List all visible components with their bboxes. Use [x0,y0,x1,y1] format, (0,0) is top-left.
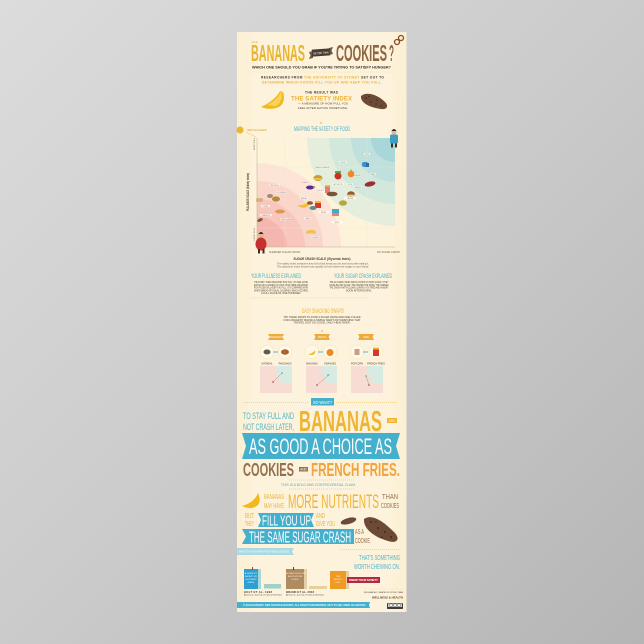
panel: your fullness explained: YOUR FULLNESS EXPLAINED [251,274,301,280]
swap 1: PANCAKES [279,362,292,366]
ribbon: as good a choice as [242,433,400,459]
heading: mapping the satiety of food [294,122,350,133]
y axis label: FULLNESS SCALE (Satiety Index) [246,173,250,211]
icon: satiety index burst: SEE THE LEGEND [247,128,267,132]
book: orange: SATIETY [334,578,343,581]
book captions [244,590,324,596]
food: rice plate [326,192,338,196]
food: pretzel [267,194,273,198]
food labels: BEEF [371,174,376,176]
icon: large cookie [364,517,398,542]
food labels: YOGURT [316,190,325,192]
icon: banana small [242,493,260,508]
panel: your sugar crash explained: THE CRASH THAT FOLLOWS, LEAVING YOU TIRED AND HUNGRY [330,286,389,290]
axis end labels: SLEEPIER SUGAR CRASH [269,251,300,254]
food labels: CORN FLAKES [280,218,293,221]
small label: and [299,467,308,472]
icon: small cookie [340,516,357,526]
conclusion headline: NOT CRASH LATER, [243,422,294,432]
ribbon: as good a choice as: AS GOOD A CHOICE AS [249,434,392,459]
icon: crashed person [256,232,266,254]
axis end labels: NO SUGAR CRASH [377,251,400,254]
fill you up line [245,512,335,530]
sugar crash line: COOKIE. [355,538,371,545]
panel: easy snacking swaps: TRY THESE SWAPS TO AVOID A SUGAR CRASH AND FEEL FULLER [284,315,361,319]
food labels: PRETZELS [270,185,280,187]
food labels: ORANGE [353,174,362,177]
panel: easy snacking swaps: TASTES JUST AS GOOD, ONLY HEALTHIER. [294,321,351,325]
book: tan [284,567,307,589]
food: pie 2 [272,196,280,202]
satiety index block: FEEL AFTER EATING SOMETHING. [298,106,348,110]
book: blue: A GUIDE TO [245,572,258,575]
panel: easy snacking swaps: EASY SNACKING SWAPS! [302,308,344,315]
small label: are: ARE [389,419,396,423]
so what badge: SO WHAT? [313,400,332,405]
panel: your fullness explained: EATING 240 CALORIES OF FOOD. HIGH FIBRE AND WATER [254,284,308,287]
panel: your sugar crash explained [330,274,392,292]
intro text [261,76,384,84]
satiety index block [291,90,352,110]
fill you up line: GIVE YOU [316,521,335,528]
food labels: CAKE [305,217,311,220]
closing line: THAT'S SOMETHING [359,553,400,562]
swap 1: OATMEAL [261,362,273,366]
so what badge [243,398,397,406]
panel: your sugar crash explained: YOUR SUGAR CRASH EXPLAINED [334,274,392,280]
small label: and: AND [300,468,308,472]
food labels: DOUGHNUT [309,237,321,239]
fill you up line: BUT [245,513,254,520]
bold claim note: THIS IS A BOLD AND CONTROVERSIAL CLAIM. [281,483,356,487]
swap 3: POPCORN [351,362,363,366]
title: COOKIES [336,40,387,66]
food labels: CROISSANT [276,191,288,194]
red ribbon [347,577,380,583]
small teal bookmark [264,584,281,588]
book: orange: THE [336,576,341,578]
red ribbon: KNOW YOUR SATIETY [349,578,378,582]
book: blue: SATIETY BY [245,575,258,578]
intro text: DETERMINE WHICH FOODS FILL YOU UP AND KEEP YOU FULL. [262,80,382,84]
panel: your fullness explained: THE SATIETY INDEX MEASURES HOW FULL YOU FEEL AFTER [254,281,308,284]
food labels: BAKED BEANS [316,166,330,169]
food: grapes [306,186,315,190]
satiety index block: — A MEASURE OF HOW FULL YOU [298,102,348,106]
swap 2: ORANGES [324,362,336,366]
swap 2: SNACK [318,336,327,339]
food labels [260,153,376,239]
conclusion headline [242,406,400,480]
panel: your fullness explained: WHITE BREAD OF EQUAL CALORIES, WHICH SCORES [254,289,308,292]
axes [257,138,395,247]
conclusion headline: TO STAY FULL AND [243,411,294,421]
book: blue: INDEX [248,582,255,584]
swap 2 [305,330,337,393]
intro text: RESEARCHERS FROM THE UNIVERSITY OF SYDNEY SET OUT TO [261,76,384,80]
food: pie [314,175,322,181]
heading: mapping the satiety of food: MAPPING THE SATIETY OF FOOD [294,127,350,133]
food: bread [275,210,285,214]
chart: satiety map: LEAST FULL [253,227,256,240]
book: tan: GUIDE [292,579,299,581]
food labels: CHEESE [354,187,362,189]
icon: cookie [361,94,387,109]
food: banana [297,202,309,208]
subtitle: WHICH ONE SHOULD YOU GRAB IF YOU'RE TRYING TO SATISFY HUNGER? [252,64,392,70]
title: ARE [251,40,258,44]
book: orange: DIET [336,582,341,584]
fill you up line: FILL YOU UP [262,512,311,530]
axis end labels [269,251,400,254]
panel: your sugar crash explained: SOON AFTER EATING. [346,289,372,292]
sugar crash line: THE SAME SUGAR CRASH [249,530,351,546]
chart: satiety map: MOST FULL [254,137,256,150]
icon: satiety index burst [236,126,267,137]
small tan bookmark [309,586,327,589]
footer bar: © 2013 HUNGRY. SEE SOURCE BOOKS. ALL RIGHTS RESERVED. NOT TO BE USED AS ADVICE. [243,603,366,607]
credits: WELLNESS & HEALTH [372,596,403,600]
sources ribbon: WANT TO KNOW MORE? READ THESE SOURCES [239,550,289,554]
food: blueberries [362,162,369,167]
nutrients line: BANANAS [264,494,284,501]
icon: banana [261,91,284,109]
x axis title and note [277,257,369,268]
sources ribbon [237,548,294,555]
swap 1: BREAKFAST [269,336,284,339]
panel: your fullness explained [251,274,308,295]
food: steak [364,181,376,187]
credits: INFOGRAPHIC CREATED BY STUDIO TEAM [364,591,403,594]
food: burger [307,201,313,205]
panel: easy snacking swaps: FOR LONGER BY MAKING A SIMPLE SWAP FOR SOMETHING THAT [284,318,361,322]
panel: easy snacking swaps [260,308,385,393]
food labels: APPLE PIE [333,183,343,186]
footer bar [237,602,370,608]
food labels: FRIES [321,212,327,214]
book: orange [330,571,349,589]
panel: your sugar crash explained: THE GLYCEMIC INDEX RANKS FOODS ON HOW QUICKLY THEY [330,281,389,284]
book captions: American Journal of Clinical Nutrition [286,594,324,596]
swap 3: FRENCH FRIES [367,362,385,366]
food: salad dish [310,206,316,210]
chart: satiety map [246,138,395,248]
text: ? [389,40,394,66]
fill you up line: AND [316,513,325,520]
poster sheet [237,32,406,612]
credits [364,591,403,600]
fill you up line: THEY [245,521,254,528]
small label: are [387,418,397,423]
ribbon: or are they [309,47,333,59]
book: tan: THE NEW GLUCOSE [284,573,306,575]
nutrients line: THAN [382,494,398,501]
nutrients line: MORE NUTRIENTS [288,492,379,513]
conclusion headline: BANANAS [299,406,382,438]
food labels: GRAPES [301,181,310,184]
icon: thin full person [390,129,398,148]
closing line [354,553,400,571]
book: blue: GLYCEMIC [245,579,257,581]
x axis title and note: The satiety index measures how full a food keeps you for two hours after eating it. [277,262,369,266]
ribbon: or are they: BETTER THAN [313,50,329,56]
food: peanuts [256,198,263,202]
food labels: BREAD [301,197,308,200]
book: tan: REVOLUTION [288,576,303,578]
swap 3 [350,334,385,393]
food labels: PASTA [347,197,354,200]
conclusion headline: COOKIES [243,460,294,480]
food labels: FISH [365,154,370,156]
food: milk carton [332,209,339,216]
title: BANANAS [251,40,305,66]
nutrients line: MAY HAVE [264,503,284,510]
bold claim note [281,480,356,489]
book captions: American Journal of Clinical Nutrition [244,594,282,596]
icon: creative commons badge [387,603,403,609]
sugar crash line [242,529,371,546]
book: blue [244,567,261,589]
satiety index block: THE RESULT WAS [305,90,339,94]
nutrients line: COOKIES [381,503,399,510]
food: croissant [306,230,316,234]
conclusion headline: FRENCH FRIES. [311,460,400,480]
x axis title and note: SUGAR CRASH SCALE (Glycemic Index) [294,257,351,261]
food labels: CHIPS [263,206,269,208]
food: salad bowl [339,200,347,206]
food: cookie plate [346,191,356,197]
swap 2: BANANAS [306,362,318,366]
nutrients line [264,492,399,513]
x axis title and note: The glycemic index shows how quickly a food raises the sugar in your blood. [277,266,369,268]
food: french fries [315,201,321,208]
panel: your fullness explained: RICH FOODS WILL KEEP YOU FULL. IT IS COMPARED WITH [254,286,308,290]
panel: your fullness explained: A FULL VALUE OF ONE HUNDRED. [261,292,301,295]
food labels: EGGS [340,162,346,164]
food: apple [334,171,342,180]
closing line: WORTH CHEWING ON. [354,562,400,571]
food: orange [348,170,354,177]
food labels: PEANUTS [262,214,271,217]
food: fries box small [325,185,330,193]
swap 1 [260,334,292,393]
book captions: BRAND ET AL. 2003 [286,590,314,594]
food labels: MILK [335,222,340,224]
panel: your sugar crash explained: RAISE BLOOD SUGAR. THE HIGHER THE SPIKE, THE HARDER [330,284,389,287]
swap 3: SIDE [363,336,369,339]
icon: chain link logo [394,36,404,44]
book captions: HOLT ET AL. 1996 [244,590,272,594]
food labels: RICE [348,184,353,186]
sugar crash line: AS A [355,529,364,536]
food: chocolate [257,217,263,223]
satiety index block: THE SATIETY INDEX [291,96,352,102]
